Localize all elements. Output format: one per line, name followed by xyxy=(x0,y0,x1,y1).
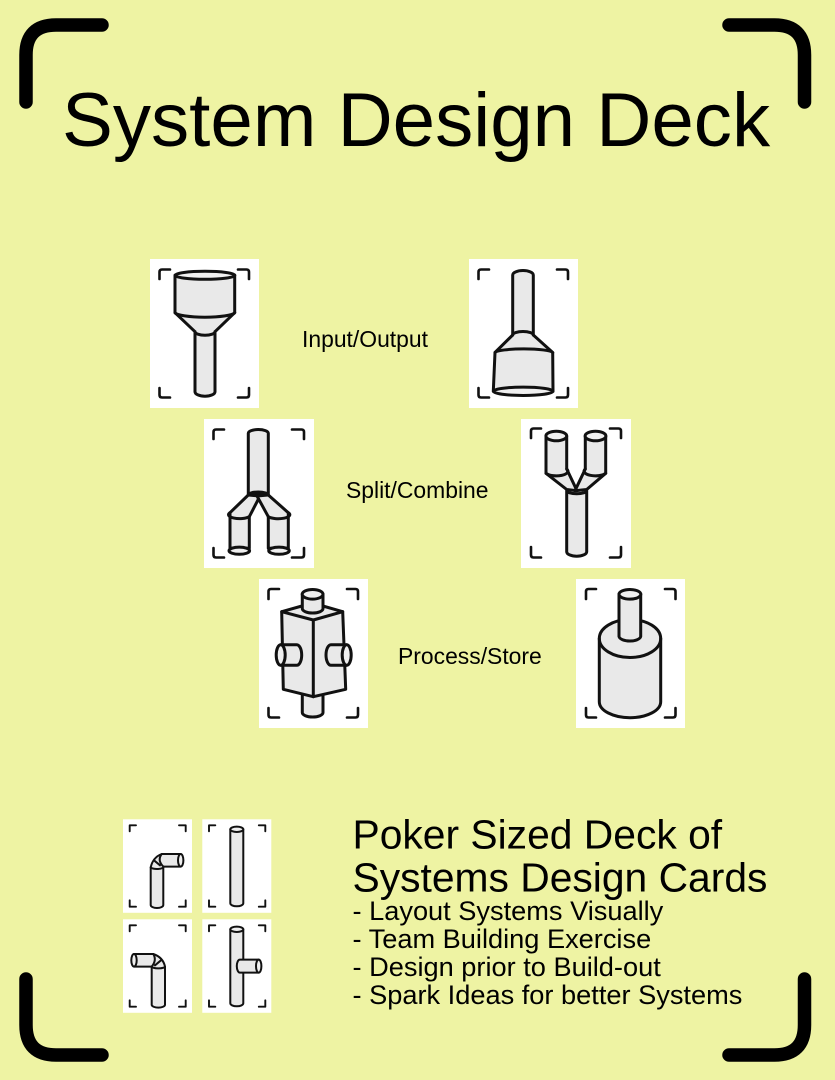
elbow pipe xyxy=(151,854,181,908)
tube xyxy=(567,491,587,556)
corner bracket: top left xyxy=(26,25,102,102)
small card: elbow right xyxy=(123,819,192,913)
small card: elbow left xyxy=(123,919,192,1013)
label: split/combine: Split/Combine xyxy=(346,477,488,503)
label: input/output: Input/Output xyxy=(302,326,429,352)
card: output funnel xyxy=(469,259,578,408)
heading: poker sized deck xyxy=(352,812,767,900)
tube xyxy=(619,594,641,641)
left leg xyxy=(546,436,577,491)
top pipe xyxy=(302,594,323,613)
heading: poker sized deck: Systems Design Cards xyxy=(352,854,767,900)
corner bracket: bottom right xyxy=(729,979,804,1055)
funnel body xyxy=(493,270,553,391)
card: process xyxy=(259,579,368,728)
right leg xyxy=(575,436,606,491)
title: System Design Deck xyxy=(62,78,771,163)
funnel body xyxy=(175,275,235,396)
right pipe xyxy=(326,645,347,665)
left pipe xyxy=(281,645,302,665)
right branch xyxy=(257,495,288,548)
small card: tee pipe xyxy=(202,919,271,1013)
box xyxy=(282,603,346,697)
tube xyxy=(248,430,268,495)
small card: straight pipe xyxy=(202,819,271,913)
feature list: - Layout Systems Visually xyxy=(352,895,664,926)
pipe xyxy=(230,829,243,906)
cylinder xyxy=(599,620,661,718)
corner bracket: bottom left xyxy=(26,979,102,1055)
label: process/store: Process/Store xyxy=(398,643,542,669)
elbow pipe xyxy=(134,954,165,1008)
bottom pipe xyxy=(302,689,323,717)
card: input funnel xyxy=(150,259,259,408)
feature list: - Team Building Exercise xyxy=(352,923,651,954)
card: combine xyxy=(521,419,631,568)
feature list xyxy=(352,895,742,1010)
heading: poker sized deck: Poker Sized Deck of xyxy=(352,812,723,858)
feature list: - Spark Ideas for better Systems xyxy=(352,979,742,1010)
corner bracket: top right xyxy=(729,25,804,102)
side pipe xyxy=(237,960,259,973)
feature list: - Design prior to Build-out xyxy=(352,951,661,982)
card: store xyxy=(576,579,685,728)
main pipe xyxy=(230,929,243,1006)
left branch xyxy=(230,495,260,548)
card: split xyxy=(204,419,314,568)
